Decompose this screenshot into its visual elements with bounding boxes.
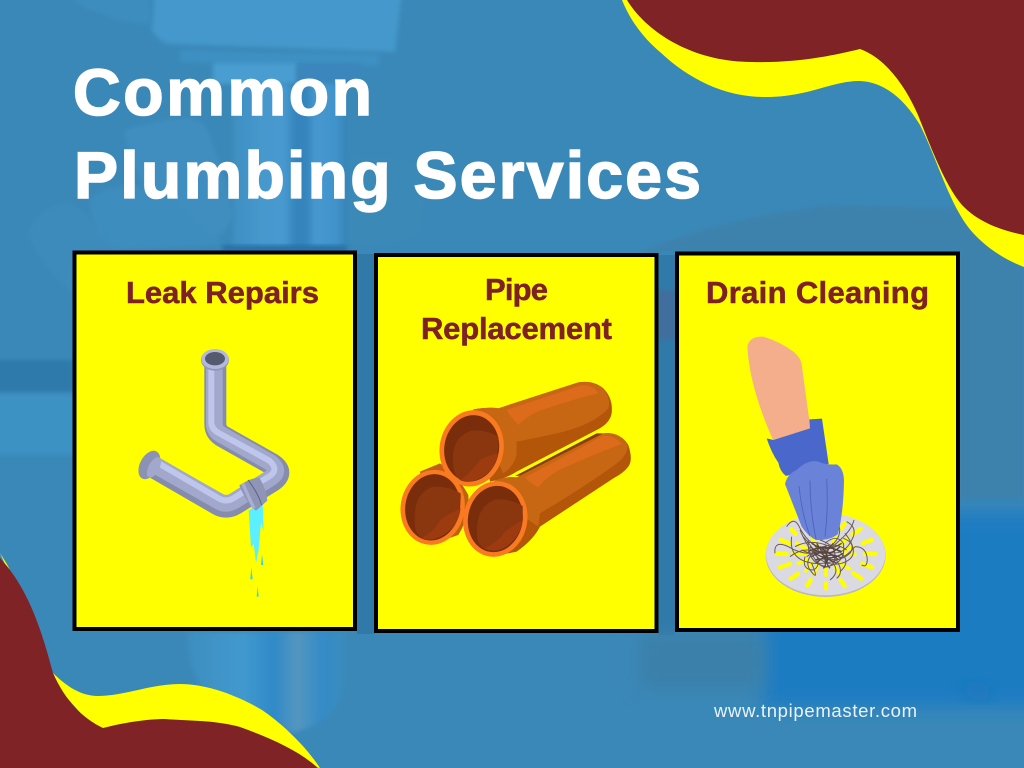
front pipe mouth (457, 476, 533, 562)
glove cuff (767, 419, 829, 476)
bottom left wave: maroon layer (0, 558, 318, 768)
heading: drain cleaning: Drain Cleaning (706, 275, 929, 310)
icon: gloved hand pulling hair from drain (747, 337, 886, 597)
arm (747, 337, 811, 441)
front pipe body (493, 433, 631, 555)
water stream (249, 502, 264, 563)
website url: www.tnpipemaster.com (713, 700, 917, 721)
title line 2: Plumbing Services (74, 138, 701, 212)
pipe top opening (201, 349, 229, 371)
heading: replacement: Replacement (421, 311, 612, 346)
title (73, 55, 701, 212)
top pipe mouth (433, 405, 510, 492)
glove hand (785, 461, 844, 540)
title line 1: Common (73, 55, 372, 129)
drain slots (777, 523, 876, 588)
top right wave: maroon layer (627, 0, 1024, 235)
panel background (376, 255, 656, 631)
panel: pipe replacement (376, 255, 656, 631)
left pipe mouth (395, 465, 471, 550)
pipe end flange left (134, 447, 165, 483)
left rear pipe (420, 463, 469, 543)
panel: drain cleaning (677, 254, 958, 630)
panel: leak repairs (74, 252, 355, 629)
top right wave: yellow layer (622, 0, 1024, 267)
bottom left wave: yellow layer (0, 553, 320, 768)
top pipe body (473, 382, 612, 482)
panel background (677, 254, 958, 630)
icon: leaking pipe (134, 349, 278, 597)
glove fingers (799, 479, 827, 539)
panel background (74, 252, 355, 629)
icon: stacked orange pipes (395, 382, 631, 562)
heading: pipe: Pipe (485, 272, 548, 307)
pipe coupling (239, 477, 267, 511)
drain plate (766, 514, 886, 597)
hair clump (775, 520, 867, 580)
heading: leak repairs: Leak Repairs (126, 275, 319, 310)
